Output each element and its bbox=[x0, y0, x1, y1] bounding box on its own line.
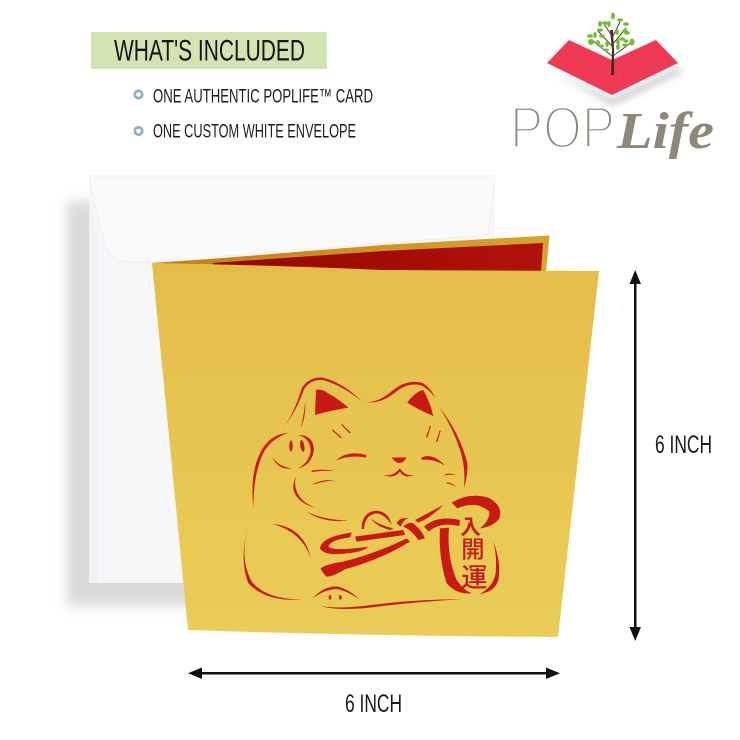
cat: face bbox=[312, 424, 456, 487]
logo: tree bbox=[587, 12, 634, 75]
cat: head outline bbox=[282, 377, 467, 488]
dimension: width arrow bbox=[188, 668, 560, 679]
cat: ribbon and knot bbox=[320, 505, 460, 577]
cat: charm bag bbox=[440, 496, 500, 595]
card: front panel bbox=[152, 263, 599, 637]
dimension: height label: 6 INCH bbox=[655, 431, 712, 459]
logo: red open book bbox=[547, 40, 678, 95]
cat: small foot bbox=[313, 586, 359, 600]
dimension: width label: 6 INCH bbox=[345, 690, 402, 718]
card: red interior bbox=[213, 243, 543, 272]
card bbox=[152, 236, 599, 637]
logo: wordmark: POP bbox=[510, 95, 615, 161]
cat: charm bag kanji bbox=[460, 510, 487, 595]
logo: book shadow bbox=[552, 68, 680, 104]
heading: what's included: WHAT'S INCLUDED bbox=[114, 34, 305, 68]
logo: wordmark: Life bbox=[616, 103, 714, 160]
list: included items bbox=[135, 86, 373, 142]
icon: bullet two bbox=[135, 127, 142, 135]
illustration: lucky cat cut-out bbox=[244, 377, 500, 609]
cat: ears bbox=[315, 390, 433, 416]
logo: wordmark bbox=[510, 95, 714, 161]
cat: charm bag kanji: 運 bbox=[461, 558, 487, 595]
envelope: body bbox=[89, 176, 495, 583]
envelope: flap bbox=[89, 176, 495, 262]
cat: charm bag kanji: 開 bbox=[461, 531, 485, 565]
dimension: height arrow bbox=[630, 270, 641, 641]
text: envelope item: ONE CUSTOM WHITE ENVELOPE bbox=[153, 120, 356, 142]
card: back panel bbox=[152, 236, 550, 272]
envelope: shadow bbox=[67, 201, 207, 606]
heading: what's included bbox=[91, 32, 327, 69]
text: card item: ONE AUTHENTIC POPLIFE™ CARD bbox=[153, 86, 373, 108]
cat: raised paw bbox=[252, 433, 314, 508]
logo: poplife bbox=[510, 12, 714, 161]
envelope bbox=[67, 176, 495, 606]
cat: body outline bbox=[244, 477, 462, 609]
icon: bullet one bbox=[135, 91, 142, 98]
cat: charm bag kanji: 入 bbox=[460, 510, 481, 540]
